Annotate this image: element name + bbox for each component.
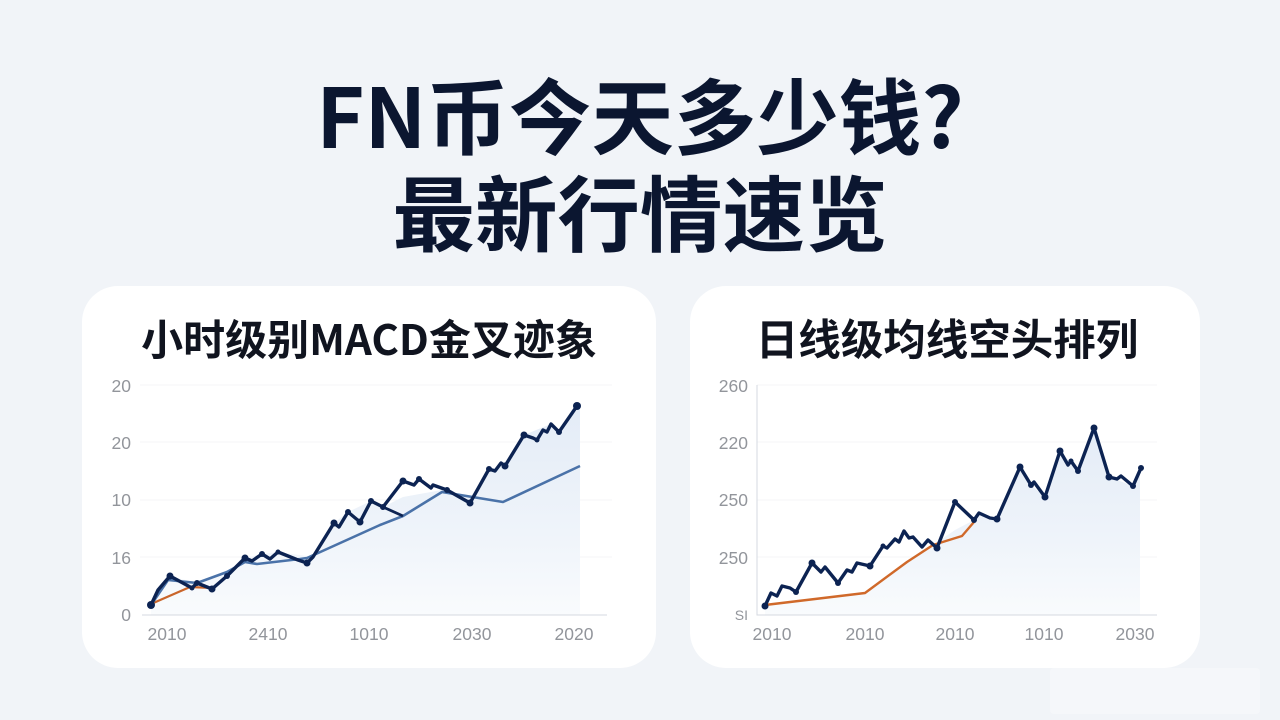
orange line right [765,522,974,605]
x axis labels left: 2030 [453,624,492,644]
y axis labels right: 250 [719,490,748,510]
panel heading: hourly MACD: 小时级别MACD金叉迹象 [141,307,597,368]
x axis labels right: 1010 [1025,624,1064,644]
x axis labels left: 2410 [249,624,288,644]
y axis labels right: 250 [719,548,748,568]
y axis labels left: 20 [112,376,131,396]
y axis labels right: 260 [719,376,748,396]
y axis labels left: 16 [112,548,131,568]
panel heading: daily moving averages: 日线级均线空头排列 [756,307,1138,368]
x axis labels right: 2010 [846,624,885,644]
dark price line left [147,402,581,609]
x axis labels left: 2010 [148,624,187,644]
dark price line right [762,424,1144,610]
y axis labels left [112,376,131,625]
x axis labels left: 2020 [555,624,594,644]
y axis labels left: 20 [112,433,131,453]
area fill right [765,428,1140,615]
chart: daily moving averages [719,376,1157,644]
x axis labels right: 2010 [753,624,792,644]
y axis labels right: SI [735,607,748,623]
main title: FN币今天多少钱? [316,52,964,172]
y axis labels left: 10 [112,490,131,510]
x axis labels right [753,624,1155,644]
y axis labels right: 220 [719,433,748,453]
area fill left [151,406,580,615]
panel: daily moving averages [690,286,1200,668]
x axis labels right: 2010 [936,624,975,644]
panel: hourly MACD [82,286,656,668]
x axis labels right: 2030 [1116,624,1155,644]
x axis labels left: 1010 [350,624,389,644]
chart: hourly MACD [112,376,612,644]
y axis labels left: 0 [121,605,131,625]
blue moving average left [151,466,580,605]
main title: 最新行情速览 [392,149,888,269]
x axis labels left [148,624,594,644]
orange line left [151,577,225,604]
y axis labels right [719,376,748,623]
main title [316,52,964,269]
watermark patch [1050,668,1260,714]
